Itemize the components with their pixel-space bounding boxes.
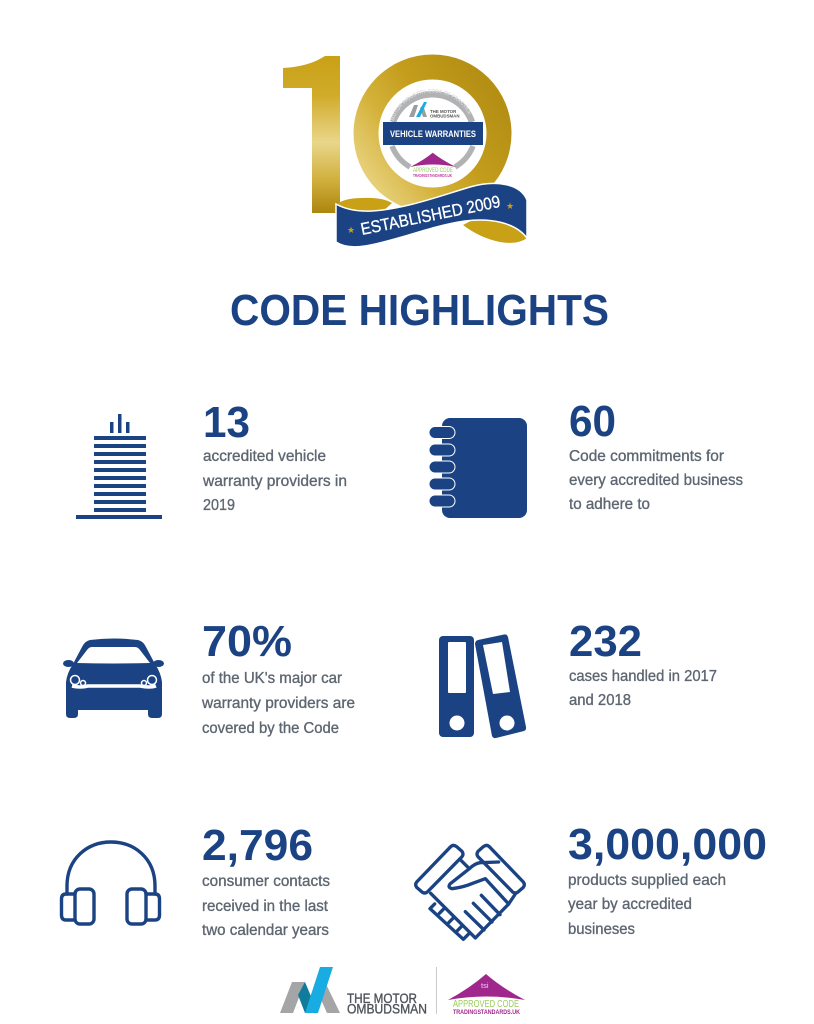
headlights — [70, 676, 156, 686]
description — [569, 668, 717, 709]
motor ombudsman wordmark: OMBUDSMAN — [347, 1002, 427, 1016]
right mirror — [153, 660, 164, 667]
stat number 13: 13 — [203, 398, 250, 447]
description: covered by the Code — [202, 720, 339, 737]
seal grey arc bottom — [392, 146, 473, 167]
icon: headphones — [62, 842, 160, 924]
description: 2019 — [203, 497, 235, 514]
description: warranty providers are — [201, 695, 355, 712]
seal approved code: APPROVED CODE — [413, 167, 453, 174]
ribbon text: ESTABLISHED 2009 — [359, 192, 502, 239]
stat number 60: 60 — [569, 397, 616, 446]
description: accredited vehicle — [203, 448, 326, 465]
description: every accredited business — [569, 472, 743, 489]
icon: notebook — [429, 418, 527, 518]
anniversary badge — [283, 54, 526, 246]
tsi triangle — [448, 974, 525, 1000]
trading standards: TRADINGSTANDARDS.UK — [453, 1009, 520, 1016]
icon: folders — [439, 634, 526, 738]
panel: code commitments — [429, 397, 743, 518]
seal logo text: OMBUDSMAN — [430, 114, 460, 118]
gold ring — [354, 54, 512, 212]
stat number 232: 232 — [569, 617, 642, 666]
panel: market coverage — [63, 617, 355, 737]
seal grey arc top — [393, 94, 472, 122]
description: warranty providers in — [202, 473, 347, 490]
description: cases handled in 2017 — [569, 668, 717, 685]
description: and 2018 — [569, 692, 631, 709]
seal banner text: VEHICLE WARRANTIES — [390, 129, 476, 139]
description — [201, 670, 355, 737]
description: to adhere to — [569, 496, 650, 513]
seal logo text: THE MOTOR — [430, 109, 457, 114]
windshield — [77, 647, 150, 664]
ribbon fold — [337, 198, 392, 214]
seal banner — [383, 122, 483, 145]
stat number 70%: 70% — [202, 617, 292, 666]
description: of the UK's major car — [202, 670, 343, 687]
description: received in the last — [202, 898, 329, 915]
approved code: APPROVED CODE — [453, 999, 519, 1010]
title: CODE HIGHLIGHTS — [230, 286, 609, 335]
description — [202, 873, 330, 939]
icon: building — [76, 414, 162, 519]
motor ombudsman logo mark — [280, 967, 340, 1013]
description: products supplied each — [568, 872, 726, 889]
ribbon — [336, 183, 527, 247]
icon: handshake — [416, 845, 524, 939]
panel: products supplied — [416, 820, 767, 939]
numeral one — [283, 56, 340, 213]
ribbon star left: ★ — [347, 225, 355, 235]
divider — [436, 967, 437, 1014]
seal tsi triangle — [410, 153, 456, 167]
seal trading standards: TRADINGSTANDARDS.UK — [413, 173, 453, 178]
description: consumer contacts — [202, 873, 330, 890]
seal curved text: MOTOR INDUSTRY CODE OF PRACTICE — [390, 88, 472, 121]
stat number 3,000,000: 3,000,000 — [568, 820, 767, 869]
description: Code commitments for — [569, 448, 725, 465]
panel: cases handled — [439, 617, 717, 738]
icon: car — [63, 638, 164, 718]
panel: accredited providers — [76, 398, 347, 519]
bumper line — [72, 686, 156, 687]
footer logos — [280, 967, 525, 1016]
white seal — [378, 80, 486, 188]
left mirror — [63, 660, 74, 667]
seal motor logo — [409, 102, 427, 117]
description — [568, 872, 726, 938]
description — [202, 448, 347, 514]
description — [569, 448, 743, 513]
ribbon tail — [463, 216, 527, 243]
description: busineses — [568, 921, 635, 938]
stat number 2,796: 2,796 — [202, 821, 313, 870]
motor ombudsman wordmark: THE MOTOR — [347, 991, 417, 1006]
panel: consumer contacts — [62, 821, 330, 939]
description: two calendar years — [202, 922, 329, 939]
ribbon star right: ★ — [506, 201, 514, 211]
description: year by accredited — [568, 896, 692, 913]
tsi mark: tsi — [481, 981, 489, 990]
